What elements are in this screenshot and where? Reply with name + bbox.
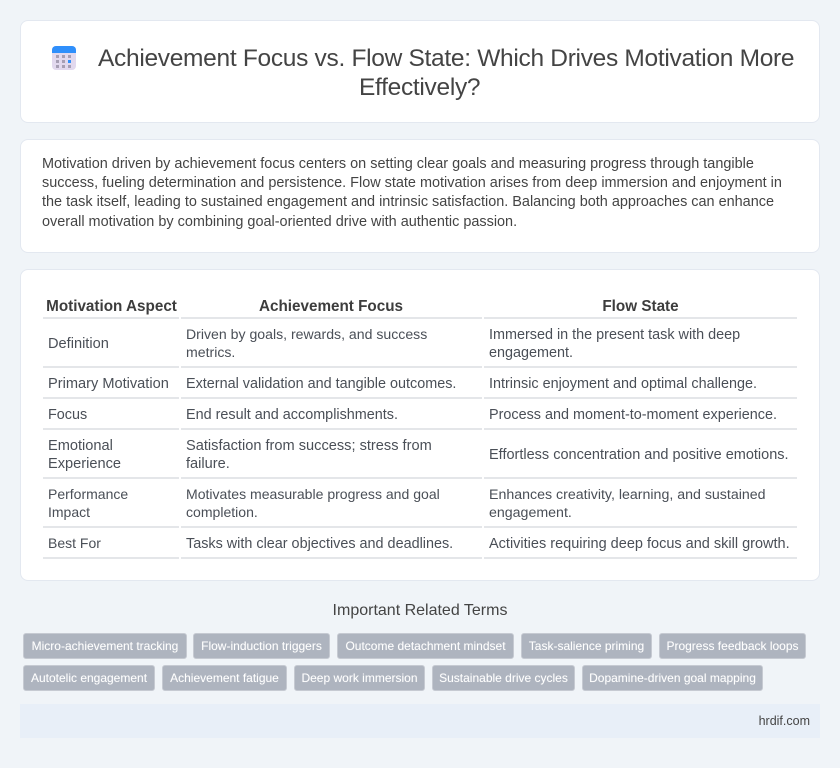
tags: related terms: Flow-induction triggers (201, 639, 322, 653)
heading: related terms: Important Related Terms (333, 602, 507, 619)
row: Definition: Immersed in the present task with deep (489, 327, 740, 343)
row: Performance Impact: Performance (48, 486, 128, 502)
table header: Achievement Focus (259, 298, 403, 315)
footer bar (20, 704, 820, 738)
tags: related terms: Achievement fatigue (170, 671, 279, 685)
row: Emotional Experience: failure. (186, 456, 230, 472)
row: Definition: Driven by goals, rewards, and success (186, 326, 427, 342)
row: Primary Motivation (48, 376, 757, 392)
tags: related terms: Dopamine-driven goal mapping (589, 671, 756, 685)
row: Performance Impact: Enhances creativity, learning, and sustained (489, 487, 766, 503)
intro paragraph: Motivation driven by achievement focus centers on setting clear goals and measuring progress through tangible (42, 156, 754, 172)
row: Focus: Process and moment-to-moment experience. (489, 407, 777, 423)
title: Effectively? (359, 74, 480, 101)
row: Best For (48, 535, 790, 552)
footer source: hrdif.com (759, 714, 810, 728)
row: Emotional Experience: Effortless concentration and positive emotions. (489, 447, 789, 463)
row: Definition: metrics. (186, 344, 235, 360)
tags: related terms: Sustainable drive cycles (439, 671, 568, 685)
tags: related terms: Outcome detachment mindset (345, 639, 506, 653)
row: Emotional Experience: Experience (48, 456, 121, 472)
row: Emotional Experience: Satisfaction from success; stress from (186, 438, 432, 454)
intro paragraph: overall motivation by combining goal-oriented drive with authentic passion. (42, 214, 517, 230)
row: Primary Motivation: External validation and tangible outcomes. (186, 376, 456, 392)
intro paragraph (42, 156, 782, 230)
tags: related terms: Autotelic engagement (31, 671, 147, 685)
row: Primary Motivation: Intrinsic enjoyment and optimal challenge. (489, 376, 757, 392)
title: Achievement Focus vs. Flow State: Which Drives Motivation More (98, 45, 794, 72)
icon: calendar (52, 46, 76, 70)
panel: introduction (20, 139, 820, 253)
title (98, 45, 794, 101)
row: Best For: Activities requiring deep focus and skill growth. (489, 536, 790, 552)
tags: related terms: Micro-achievement tracking (32, 639, 178, 653)
row: Emotional Experience: Emotional (48, 438, 113, 454)
panel: title header (20, 20, 820, 123)
row: Performance Impact: engagement. (489, 505, 572, 521)
row: Primary Motivation: Primary Motivation (48, 376, 169, 392)
row: Performance Impact: Motivates measurable progress and goal (186, 486, 440, 502)
row: Definition (48, 326, 740, 361)
row: Definition: engagement. (489, 345, 573, 361)
row: Performance Impact (48, 486, 766, 521)
row: Best For: Best For (48, 535, 101, 551)
row: Performance Impact: Impact (48, 504, 90, 520)
tags: related terms: Deep work immersion (301, 671, 418, 685)
tags: related terms: Task-salience priming (529, 639, 644, 653)
intro paragraph: the task itself, leading to sustained engagement and intrinsic satisfaction. Balancing both approaches can enhance (42, 194, 774, 210)
row: Focus (48, 407, 777, 423)
intro paragraph: success, fueling determination and persistence. Flow state motivation arises from deep immersion and enjoyment in (42, 175, 782, 191)
table header: Motivation Aspect (46, 298, 177, 315)
row: Definition: Definition (48, 336, 109, 352)
panel: comparison table (20, 269, 820, 581)
tags: related terms: Progress feedback loops (666, 639, 799, 653)
table header (46, 298, 679, 315)
row: Performance Impact: completion. (186, 504, 258, 520)
row: Focus: End result and accomplishments. (186, 407, 398, 423)
row: Emotional Experience (48, 438, 789, 472)
table header: Flow State (602, 298, 679, 315)
row: Focus: Focus (48, 407, 87, 423)
tags: related terms (23, 633, 806, 691)
row: Best For: Tasks with clear objectives and deadlines. (186, 536, 453, 552)
